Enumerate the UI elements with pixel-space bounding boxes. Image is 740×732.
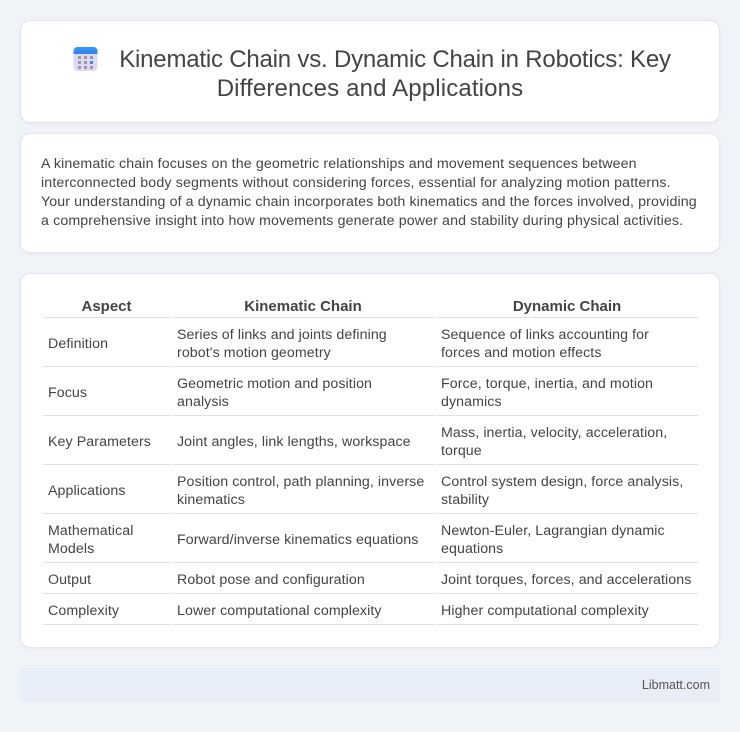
footer text: Libmatt.com	[642, 678, 710, 692]
icon: calendar grid	[74, 47, 98, 71]
row: Focus: Geometric motion and position	[177, 376, 372, 392]
row: Definition: forces and motion effects	[441, 345, 602, 361]
panel: title card	[20, 20, 720, 123]
row: Key Parameters	[48, 425, 667, 459]
row: Output: Output	[48, 572, 91, 588]
table header	[81, 298, 621, 315]
row: Applications: Applications	[48, 483, 126, 499]
footer bar	[20, 668, 720, 702]
row: Applications	[48, 474, 683, 508]
row: Complexity: Higher computational complexity	[441, 603, 649, 619]
row: Mathematical Models: Newton-Euler, Lagrangian dynamic	[441, 523, 665, 539]
row: Complexity: Lower computational complexity	[177, 603, 382, 619]
row: Focus: Focus	[48, 385, 87, 401]
title	[119, 46, 671, 102]
row: Mathematical Models	[48, 523, 665, 557]
table header: Dynamic Chain	[513, 298, 621, 315]
row: Applications: stability	[441, 492, 489, 508]
row: Focus: dynamics	[441, 394, 502, 410]
row: Definition	[48, 327, 649, 361]
panel: introduction	[20, 133, 720, 253]
table header: Kinematic Chain	[244, 298, 362, 315]
panel: comparison table	[20, 273, 720, 648]
title: Kinematic Chain vs. Dynamic Chain in Robotics: Key	[119, 46, 671, 73]
row: Output	[48, 572, 691, 588]
row: Output: Joint torques, forces, and accelerations	[441, 572, 691, 588]
row: Focus: Force, torque, inertia, and motion	[441, 376, 653, 392]
text block: introduction: interconnected body segments without considering forces, essential for analyzing motion patterns.	[41, 175, 671, 191]
row: Output: Robot pose and configuration	[177, 572, 365, 588]
row: Definition: Series of links and joints defining	[177, 327, 387, 343]
row: Complexity: Complexity	[48, 603, 119, 619]
row: Focus: analysis	[177, 394, 229, 410]
row: Mathematical Models: Forward/inverse kinematics equations	[177, 532, 418, 548]
row: Applications: Control system design, force analysis,	[441, 474, 683, 490]
table header: Aspect	[81, 298, 132, 315]
row: Mathematical Models: Models	[48, 541, 94, 557]
row: Key Parameters: torque	[441, 443, 482, 459]
row: Mathematical Models: Mathematical	[48, 523, 133, 539]
text block: introduction	[41, 156, 697, 229]
row: Mathematical Models: equations	[441, 541, 503, 557]
row: Focus	[48, 376, 653, 410]
row: Applications: kinematics	[177, 492, 245, 508]
row: Key Parameters: Key Parameters	[48, 434, 151, 450]
title: Differences and Applications	[217, 75, 523, 102]
text block: introduction: a comprehensive insight into how movements generate power and stability during physical activities.	[41, 213, 683, 229]
row: Key Parameters: Mass, inertia, velocity, acceleration,	[441, 425, 667, 441]
text block: introduction: Your understanding of a dynamic chain incorporates both kinematics and the forces involved, providing	[41, 194, 697, 210]
row: Complexity	[48, 603, 649, 619]
text block: introduction: A kinematic chain focuses on the geometric relationships and movement sequences between	[41, 156, 637, 172]
row: Key Parameters: Joint angles, link lengths, workspace	[177, 434, 411, 450]
row: Definition: robot's motion geometry	[177, 345, 331, 361]
row: Applications: Position control, path planning, inverse	[177, 474, 424, 490]
row: Definition: Definition	[48, 336, 108, 352]
row: Definition: Sequence of links accounting for	[441, 327, 649, 343]
